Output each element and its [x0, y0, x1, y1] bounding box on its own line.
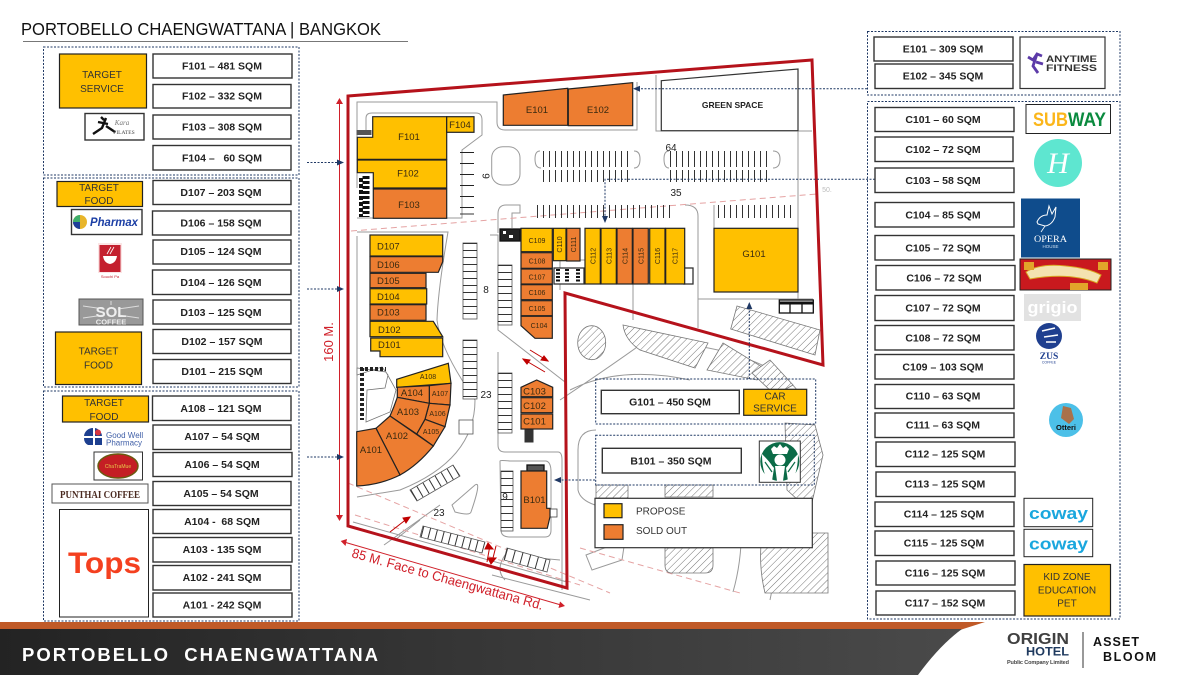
unit A106	[153, 452, 292, 476]
unit block C: C107	[529, 274, 545, 282]
logo: ZUS Coffee	[1036, 323, 1062, 364]
logo: Otteri: Otteri	[1056, 423, 1076, 432]
unit block C: C117	[672, 248, 680, 264]
unit F101	[153, 54, 292, 78]
logo: Good Well Pharmacy	[84, 428, 143, 448]
logo: Origin Hotel	[1007, 631, 1083, 668]
unit F103	[153, 115, 291, 139]
unit block F	[357, 117, 474, 218]
logo: Good Well Pharmacy: Good Well	[106, 431, 143, 440]
unit block A: A103	[397, 407, 419, 418]
logo: ChaTraMue tea: ChaTraMue	[105, 464, 131, 470]
unit block C	[521, 228, 685, 429]
logo: Tops: Tops	[68, 547, 141, 580]
logo: Good Well Pharmacy: Pharmacy	[106, 438, 142, 448]
logo: pilates: PILATES	[113, 130, 135, 136]
unit D105	[153, 240, 291, 264]
logo: Subway	[1026, 104, 1110, 134]
legend	[595, 498, 812, 548]
unit D101	[153, 360, 291, 384]
unit block C: C115	[638, 248, 646, 264]
unit E101	[874, 37, 1013, 61]
unit D104	[152, 270, 291, 294]
unit D103: D103 – 125 SQM	[180, 307, 262, 319]
parking stalls	[410, 152, 795, 572]
unit B101	[521, 471, 550, 528]
logo: ChaTraMue tea	[94, 452, 142, 480]
unit A107: A107 – 54 SQM	[184, 431, 260, 443]
label: target food A108	[62, 396, 148, 423]
unit C107: C107 – 72 SQM	[905, 302, 981, 314]
unit A107	[153, 425, 291, 450]
unit A108	[152, 396, 291, 420]
unit C117	[876, 591, 1015, 615]
logo: red noodle brand: Souchi Pa	[101, 274, 120, 279]
label: kid zone: KID ZONE	[1043, 572, 1091, 583]
logo: Subway: WAY	[1068, 110, 1106, 131]
unit G101 area	[601, 390, 739, 414]
unit C109	[875, 354, 1014, 379]
unit D107	[153, 180, 291, 204]
arrow: A panel to plan	[307, 454, 344, 460]
unit C107	[875, 296, 1014, 320]
unit A104: A104 - 68 SQM	[184, 516, 260, 528]
service blocks	[356, 130, 813, 517]
label: target food top: FOOD	[85, 196, 113, 207]
unit block A: A101	[360, 445, 382, 456]
logo: Pharmax	[72, 210, 142, 234]
unit F102: F102 – 332 SQM	[182, 90, 262, 102]
logo: Opera House	[1021, 198, 1080, 258]
unit block D: D106	[377, 260, 400, 271]
unit C104	[875, 202, 1014, 227]
unit A105	[153, 482, 291, 506]
dimension labels	[433, 143, 682, 519]
unit D102	[153, 330, 291, 354]
unit D103	[153, 300, 291, 324]
logo: Asset Bloom: ASSET	[1093, 635, 1139, 649]
unit block C: C108	[529, 258, 545, 266]
label: target food bottom	[56, 332, 142, 384]
unit block D: D104	[377, 292, 400, 303]
unit C112: C112 – 125 SQM	[905, 448, 986, 460]
label: target service: TARGET	[82, 70, 122, 81]
unit block C: C102	[523, 401, 546, 412]
unit C105: C105 – 72 SQM	[905, 242, 981, 254]
panel: B101	[596, 435, 814, 485]
unit F102	[153, 84, 291, 108]
unit A104	[153, 510, 291, 534]
unit C116: C116 – 125 SQM	[905, 568, 986, 580]
legend: propose: PROPOSE	[636, 506, 686, 518]
unit C113: C113 – 125 SQM	[905, 478, 986, 490]
unit block F: F103	[398, 200, 420, 211]
logo: Sol Coffee: SOL	[96, 304, 126, 321]
unit block D: D101	[378, 340, 401, 351]
logo: Otteri	[1049, 403, 1083, 437]
logo: Origin Hotel: HOTEL	[1026, 644, 1069, 658]
unit block E: E102	[587, 105, 609, 116]
unit block C: C101	[523, 416, 546, 428]
footer title: PORTOBELLO CHAENGWATTANA	[22, 644, 378, 665]
label: target food top: TARGET	[79, 183, 119, 194]
logo: H circle: H	[1046, 147, 1071, 180]
unit C109: C109 – 103 SQM	[902, 362, 984, 374]
unit block C: C109	[529, 238, 545, 245]
unit block A	[357, 363, 451, 486]
unit D102: D102 – 157 SQM	[181, 336, 263, 348]
panel: C units	[868, 102, 1120, 619]
unit F104: F104 – 60 SQM	[182, 152, 262, 164]
unit block A: A104	[401, 388, 423, 399]
logo: Tops	[60, 510, 148, 617]
site plan	[321, 60, 832, 613]
unit block A: A106	[429, 411, 446, 418]
arrow: E panel to plan	[633, 86, 867, 92]
unit C110	[875, 384, 1014, 408]
arrow: F panel to plan	[307, 160, 344, 166]
label: target food top	[57, 182, 142, 207]
unit block C: C106	[529, 290, 545, 297]
unit E102	[875, 64, 1013, 88]
logo: H circle	[1034, 139, 1082, 187]
dimension labels: 64	[665, 143, 677, 154]
panel: D units	[44, 178, 299, 387]
unit A101	[153, 593, 292, 617]
label: target food bottom: FOOD	[84, 360, 113, 372]
dimension labels: 23	[433, 508, 445, 519]
dimension: 160 M	[321, 98, 343, 521]
road outlines	[353, 75, 813, 600]
unit E102: E102 – 345 SQM	[903, 70, 984, 82]
logo: Anytime Fitness: ANYTIME	[1046, 54, 1097, 65]
unit C114: C114 – 125 SQM	[904, 508, 985, 520]
logo: Coway C114	[1024, 498, 1093, 527]
panel: A units	[44, 391, 299, 621]
legend: sold out	[604, 525, 687, 539]
logo: Opera House: HOUSE	[1042, 244, 1059, 249]
logo: grigio	[1024, 294, 1081, 321]
unit A103: A103 - 135 SQM	[183, 544, 262, 556]
logo: Pharmax: Pharmax	[90, 217, 139, 229]
unit G101	[714, 228, 798, 292]
unit C112	[876, 442, 1015, 466]
unit E101: E101 – 309 SQM	[903, 44, 984, 56]
unit block E	[503, 83, 633, 126]
logo: Starbucks	[759, 441, 800, 482]
pink setback lines	[348, 187, 832, 593]
unit D106	[152, 211, 291, 235]
label: car service: CAR	[764, 392, 786, 402]
label: car service	[744, 389, 807, 415]
unit C101: C101 – 60 SQM	[905, 114, 981, 126]
legend: propose	[604, 504, 686, 518]
unit C110: C110 – 63 SQM	[906, 390, 981, 402]
logo: pilates: Kara	[114, 119, 130, 127]
unit block D: D102	[378, 325, 401, 336]
unit F103: F103 – 308 SQM	[182, 122, 262, 134]
label: kid zone	[1024, 564, 1110, 616]
logo: Sol Coffee: COFFEE	[96, 318, 126, 326]
unit block C: C105	[529, 306, 545, 313]
label: target food A108: FOOD	[90, 412, 118, 423]
unit C108	[875, 326, 1014, 350]
unit block E: E101	[526, 105, 548, 116]
logo: Anytime Fitness	[1020, 37, 1105, 88]
logo: Coway C115: coway	[1029, 534, 1089, 554]
unit block F: F102	[397, 168, 419, 180]
logo: Coway C114: coway	[1029, 504, 1089, 523]
green space	[661, 69, 798, 131]
label: target service	[60, 54, 146, 108]
label: car service: SERVICE	[753, 404, 797, 414]
unit A102: A102 - 241 SQM	[183, 572, 262, 584]
unit A106: A106 – 54 SQM	[184, 459, 260, 471]
unit B101: B101	[523, 495, 546, 506]
unit block C: C103	[523, 386, 546, 398]
title: PORTOBELLO CHAENGWATTANA | BANGKOK	[21, 19, 381, 39]
arrow: G panel to plan	[746, 302, 752, 379]
unit C102	[875, 137, 1013, 162]
unit F101: F101 – 481 SQM	[182, 60, 262, 72]
footer band	[0, 622, 985, 675]
hatched areas	[578, 306, 828, 593]
unit G101: G101	[742, 249, 766, 260]
site boundary	[348, 60, 823, 588]
traffic arrows	[390, 350, 548, 564]
dimension: 160 M: 160 M.	[321, 322, 336, 362]
unit block D: D105	[377, 276, 400, 287]
unit C111: C111 – 63 SQM	[906, 420, 980, 432]
unit block D: D107	[377, 242, 400, 252]
unit C108: C108 – 72 SQM	[905, 332, 981, 344]
unit C115	[875, 531, 1014, 556]
logo: Coway C115	[1024, 529, 1093, 557]
logo: ZUS Coffee: ZUS	[1040, 352, 1058, 362]
green space: GREEN SPACE	[702, 100, 763, 110]
unit C106: C106 – 72 SQM	[906, 272, 982, 284]
unit C116	[876, 561, 1015, 585]
logo: Asset Bloom	[1093, 635, 1156, 664]
dimension labels: 8	[483, 285, 489, 296]
pink setback lines: 50.	[822, 187, 832, 194]
unit A102	[153, 566, 291, 590]
logo: Punthai Coffee: PUNTHAI COFFEE	[60, 490, 140, 501]
dimension: 85 M frontage: 85 M. Face to Chaengwattana Rd.	[350, 545, 545, 613]
logo: grigio: grigio	[1028, 298, 1078, 317]
unit A108: A108 – 121 SQM	[180, 403, 262, 415]
unit block A: A105	[423, 429, 439, 436]
unit D105: D105 – 124 SQM	[180, 246, 262, 258]
dimension labels: 35	[670, 188, 682, 199]
legend: sold out: SOLD OUT	[636, 526, 687, 537]
arrow: B panel to plan	[554, 477, 595, 483]
unit block F: F101	[398, 132, 420, 143]
label: target service: SERVICE	[80, 84, 124, 95]
label: kid zone: PET	[1057, 598, 1077, 610]
logo: Subway: SUB	[1033, 110, 1068, 131]
unit C103	[875, 168, 1014, 192]
unit G101 area: G101 – 450 SQM	[629, 396, 711, 408]
unit B101 area: B101 – 350 SQM	[630, 456, 712, 468]
unit D104: D104 – 126 SQM	[180, 277, 262, 289]
logo: red banner restaurant	[1020, 259, 1111, 290]
logo: Asset Bloom: BLOOM	[1103, 650, 1156, 664]
dimension labels: 9	[502, 492, 508, 503]
logo: Origin Hotel: Public Company Limited	[1007, 660, 1069, 666]
unit block C: C114	[622, 248, 630, 264]
logo: Sol Coffee	[79, 299, 143, 326]
unit block D: D103	[377, 308, 400, 318]
unit block C: C111	[571, 237, 578, 252]
label: target food bottom: TARGET	[79, 346, 118, 358]
unit A101: A101 - 242 SQM	[183, 600, 262, 612]
unit block C: C113	[606, 248, 614, 264]
unit C106	[876, 266, 1015, 290]
unit block C: C104	[531, 323, 547, 330]
arrow: C panel to plan	[602, 179, 875, 223]
unit block D	[370, 235, 443, 357]
panel: G101	[596, 379, 816, 424]
dimension labels: 9	[479, 173, 490, 179]
unit block C: C116	[655, 248, 662, 264]
logo: Opera House: OPERA	[1034, 234, 1068, 244]
unit C102: C102 – 72 SQM	[905, 144, 981, 156]
arrow: D panel to plan	[307, 286, 344, 292]
label: kid zone: EDUCATION	[1038, 586, 1096, 596]
unit D101: D101 – 215 SQM	[181, 366, 263, 378]
unit A103	[153, 538, 292, 562]
unit F104	[153, 146, 291, 170]
logo: Anytime Fitness: FITNESS	[1046, 63, 1097, 74]
logo: Punthai Coffee	[52, 484, 148, 503]
unit C117: C117 – 152 SQM	[905, 598, 986, 610]
unit block A: A107	[432, 391, 448, 398]
unit C111	[875, 413, 1014, 438]
dimension labels: 23	[480, 390, 492, 401]
unit D106: D106 – 158 SQM	[180, 218, 262, 230]
unit C114	[875, 502, 1014, 526]
unit C113	[876, 472, 1015, 496]
unit block C: C110	[557, 236, 564, 253]
unit block F: F104	[449, 120, 471, 131]
logo: pilates	[85, 114, 144, 140]
unit C104: C104 – 85 SQM	[905, 210, 981, 222]
unit C101	[875, 108, 1014, 132]
panel: E units	[868, 32, 1120, 95]
unit block C: C112	[590, 248, 598, 264]
unit block A: A108	[420, 374, 436, 381]
unit B101 area	[602, 448, 741, 473]
unit C103: C103 – 58 SQM	[905, 175, 981, 187]
unit A105: A105 – 54 SQM	[183, 488, 259, 500]
logo: red noodle brand	[98, 243, 122, 279]
unit C105	[875, 236, 1014, 260]
panel: F units	[44, 47, 299, 175]
unit C115: C115 – 125 SQM	[904, 538, 985, 550]
unit D107: D107 – 203 SQM	[180, 187, 262, 199]
label: target food A108: TARGET	[84, 398, 124, 409]
unit block A: A102	[386, 431, 408, 442]
logo: ZUS Coffee: COFFEE	[1042, 360, 1057, 364]
logo: Origin Hotel: ORIGIN	[1007, 631, 1069, 648]
